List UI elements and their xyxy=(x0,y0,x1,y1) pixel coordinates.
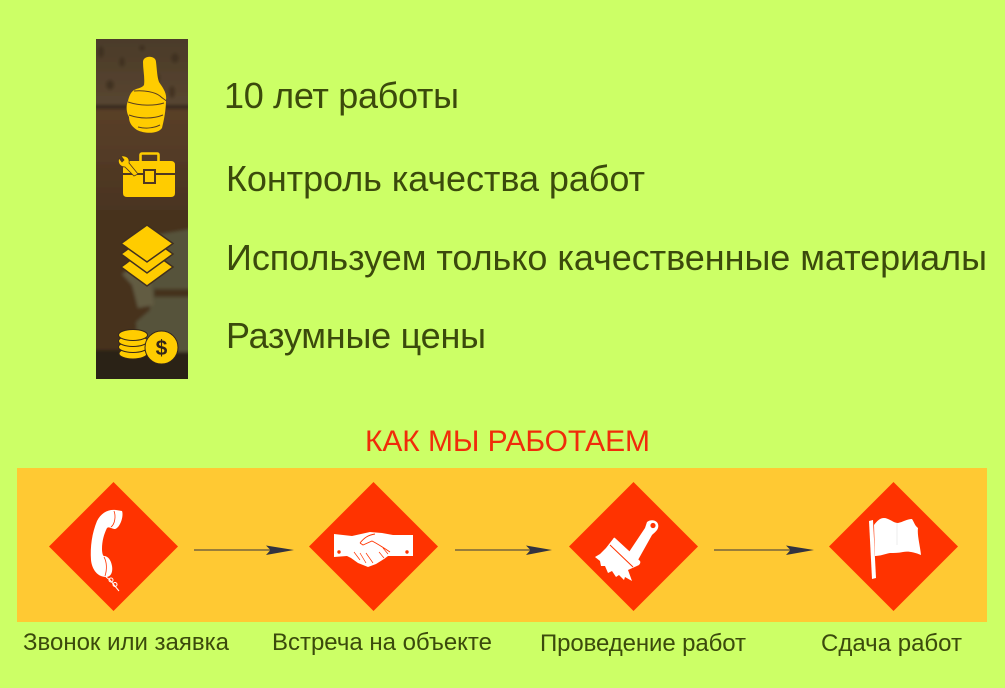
arrow 1 xyxy=(194,546,294,555)
heading: КАК МЫ РАБОТАЕМ xyxy=(365,425,650,458)
icon: flag xyxy=(869,518,921,579)
icon: phone handset xyxy=(91,510,123,591)
label: step 1: Звонок или заявка xyxy=(23,629,230,656)
icon: coins with dollar: $ xyxy=(156,337,168,360)
icon: paint brush xyxy=(595,520,658,581)
icon: toolbox xyxy=(118,154,175,197)
panel: photo strip with advantage icons xyxy=(96,39,188,379)
step 4: flag xyxy=(829,482,958,611)
step 2: handshake xyxy=(309,482,438,611)
icon: thumbs up xyxy=(127,57,166,133)
step 1: phone xyxy=(49,482,178,611)
label: step 2: Встреча на объекте xyxy=(272,629,492,656)
icon: layers xyxy=(121,225,173,286)
step 3: brush xyxy=(569,482,698,611)
panel: process band xyxy=(17,468,987,622)
advantage: prices: Разумные цены xyxy=(226,315,486,356)
label: step 3: Проведение работ xyxy=(540,630,746,657)
advantage: quality control: Контроль качества работ xyxy=(226,158,645,199)
icon: handshake xyxy=(334,532,413,567)
step labels xyxy=(23,629,962,657)
label: step 4: Сдача работ xyxy=(821,630,962,657)
arrow 2 xyxy=(455,546,552,555)
arrow 3 xyxy=(714,546,814,555)
icon: coins with dollar xyxy=(118,330,178,364)
advantage: materials: Используем только качественные материалы xyxy=(226,237,987,278)
text block: advantages xyxy=(224,75,987,356)
advantage: years: 10 лет работы xyxy=(224,75,459,116)
